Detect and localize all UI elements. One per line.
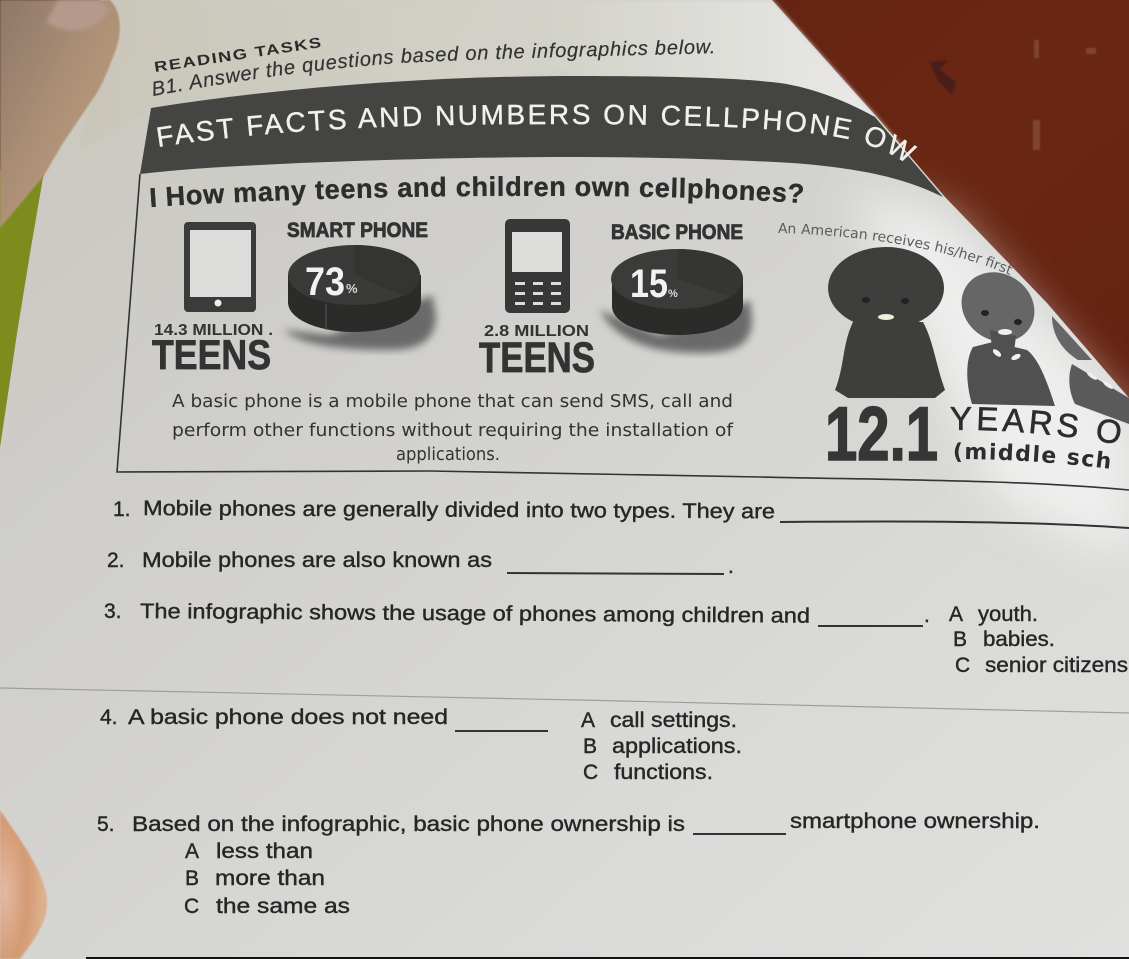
teens label: TEENS (479, 334, 595, 382)
15 value: 15 (630, 262, 668, 306)
options: youth. (978, 603, 1038, 626)
question 1: Mobile phones are generally divided into two types. They are (143, 497, 775, 523)
question 5: Based on the infographic, basic phone ownership is (132, 813, 685, 836)
question 2: 2. (107, 549, 125, 572)
panel: basic phone (479, 219, 752, 382)
icon: tablet phone (184, 222, 256, 312)
question 2 (107, 549, 734, 578)
middle school label: (middle sch (954, 442, 1110, 469)
text block: basic phone definition: perform other functions without requiring the installation of (172, 420, 734, 441)
options: B (583, 735, 597, 758)
background: finger at bottom-left (0, 810, 47, 959)
options: A (949, 603, 963, 626)
options: C (184, 895, 199, 918)
options: more than (215, 867, 325, 890)
options: C (583, 761, 598, 784)
teens label: TEENS (152, 331, 271, 378)
text block: basic phone definition (172, 391, 734, 465)
options: senior citizens (985, 654, 1128, 677)
text block: basic phone definition: applications. (396, 444, 500, 465)
question 2: Mobile phones are also known as (142, 549, 492, 572)
73 value: 73 (305, 260, 345, 304)
pie chart: 73 percent (284, 245, 436, 350)
options (949, 603, 1128, 677)
question 4 (100, 706, 742, 784)
options: A (581, 709, 595, 732)
text block: basic phone definition: A basic phone is a mobile phone that can send SMS, call and (172, 391, 733, 412)
question 1 (113, 497, 1129, 528)
wall streaks (1033, 40, 1096, 150)
instruction line: B1. Answer the questions based on the infographics below. (153, 39, 713, 96)
options: C (955, 654, 970, 677)
12.1 value: 12.1 (825, 392, 938, 477)
options: B (953, 628, 967, 651)
pie chart: 15 percent (600, 249, 752, 353)
percent mark: % (346, 281, 358, 296)
question 2: . (728, 555, 734, 578)
wall mark (930, 60, 956, 95)
options: applications. (612, 735, 742, 758)
options (184, 840, 350, 918)
panel: smart phone (152, 219, 436, 378)
2.8 million: 2.8 MILLION (484, 323, 589, 340)
options: babies. (983, 628, 1055, 651)
question 5: smartphone ownership. (790, 810, 1040, 833)
question 4: A basic phone does not need (128, 706, 448, 729)
options: call settings. (610, 709, 737, 732)
question 5 (97, 810, 1040, 918)
background: hand at top-left (0, 0, 120, 228)
options: the same as (216, 895, 350, 918)
section heading: I How many teens and children own cellphones? (150, 176, 803, 208)
icon: third child figure (1052, 316, 1129, 424)
question 1: 1. (113, 498, 131, 521)
question 3: . (924, 604, 930, 627)
question 3 (104, 600, 1128, 677)
percent mark: % (668, 288, 678, 300)
background: green surface (0, 150, 60, 447)
fingernail (46, 0, 110, 31)
icon: keypad phone (505, 219, 570, 313)
question 3: 3. (104, 600, 122, 623)
basic phone label: BASIC PHONE (611, 221, 743, 244)
panel outline (117, 174, 1129, 490)
caption: american receives: An American receives his/her first (778, 222, 1012, 275)
fold line (0, 688, 1129, 713)
question 4: 4. (100, 706, 118, 729)
options: functions. (614, 761, 713, 784)
options: less than (216, 840, 313, 863)
table edge at the bottom (86, 957, 1129, 959)
smart phone label: SMART PHONE (287, 219, 428, 242)
14.3 million: 14.3 MILLION . (154, 322, 273, 339)
reading tasks heading: READING TASKS (153, 35, 324, 76)
stat: 12.1 years (825, 392, 1121, 477)
title banner (140, 76, 943, 197)
options: B (185, 867, 199, 890)
question 3: The infographic shows the usage of phones among children and (140, 600, 810, 628)
question 5: 5. (97, 813, 115, 836)
banner title: FAST FACTS AND NUMBERS ON CELLPHONE OW (157, 104, 918, 162)
icon: boy figure (948, 258, 1055, 406)
options (581, 709, 742, 784)
years label: YEARS O (950, 406, 1121, 444)
icon: girl figure (828, 247, 945, 398)
options: A (185, 840, 199, 863)
